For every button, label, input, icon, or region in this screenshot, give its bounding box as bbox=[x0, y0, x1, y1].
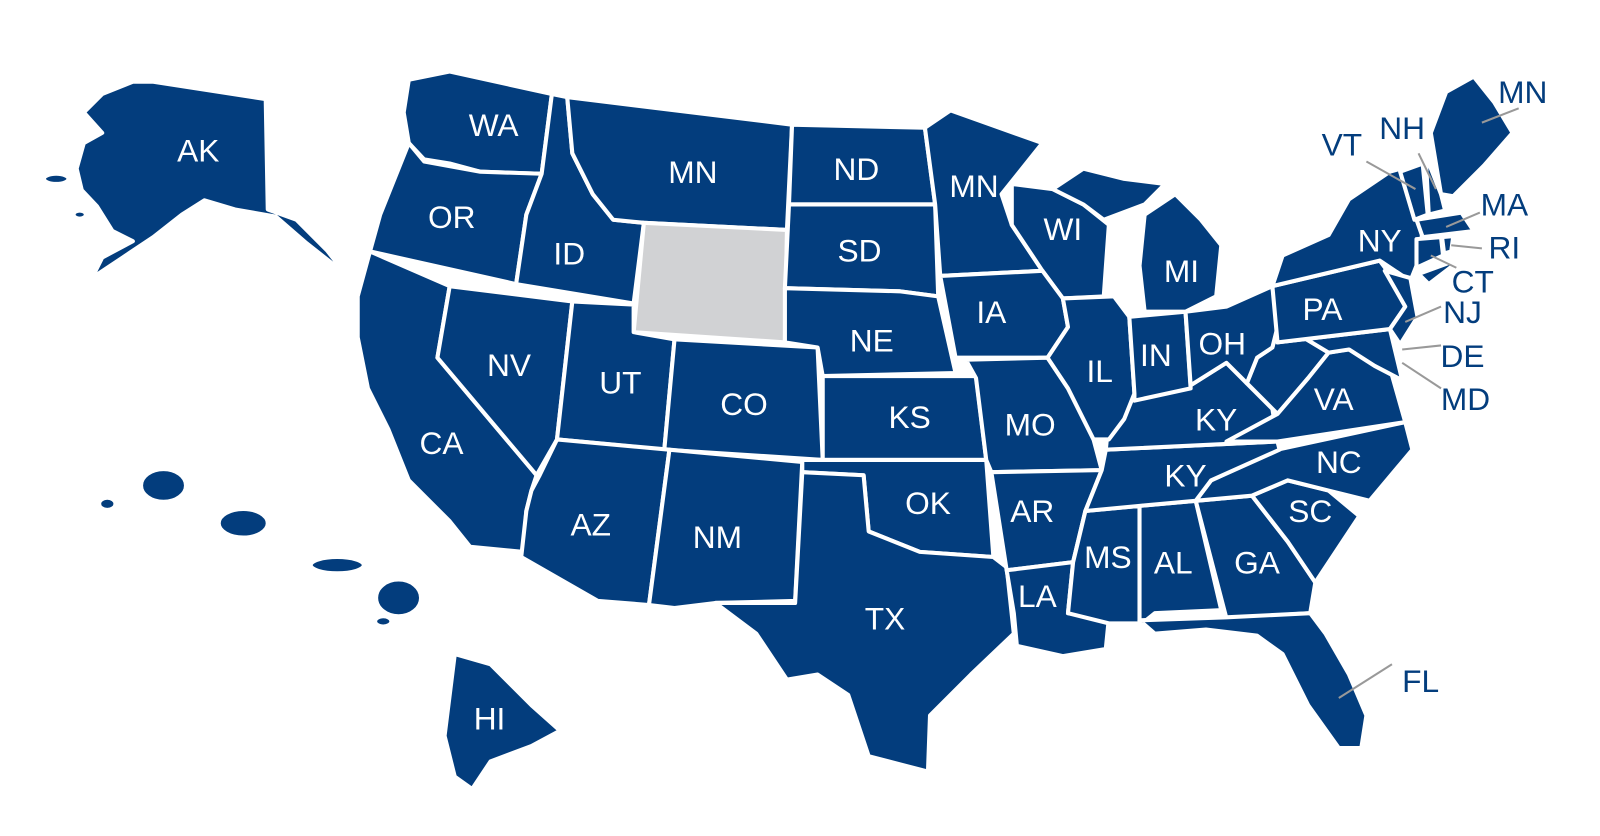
state: IN: IN bbox=[1140, 337, 1172, 373]
callout labels: northeast and FL: NH bbox=[1379, 110, 1425, 146]
state: AZ bbox=[521, 439, 669, 605]
state: MI bbox=[1053, 169, 1221, 312]
state: ND: ND bbox=[834, 151, 879, 187]
state: IN bbox=[1129, 312, 1191, 401]
state: MO: MO bbox=[1005, 406, 1056, 442]
state: VA: VA bbox=[1314, 381, 1355, 417]
state: TX bbox=[715, 472, 1014, 772]
state: CT bbox=[1416, 237, 1443, 268]
state: CO: CO bbox=[720, 386, 768, 422]
state: NE bbox=[785, 288, 956, 376]
state: WA: WA bbox=[469, 107, 519, 143]
state: OR bbox=[370, 143, 542, 284]
state: AL bbox=[1140, 501, 1221, 625]
state: MA bbox=[1416, 213, 1474, 237]
state: MS: MS bbox=[1084, 539, 1132, 575]
state: SD bbox=[785, 204, 938, 296]
state: NE: NE bbox=[850, 323, 894, 359]
state: ND bbox=[789, 125, 935, 204]
state: LA: LA bbox=[1018, 578, 1058, 614]
state: VT bbox=[1400, 164, 1428, 220]
state: MT: MN bbox=[668, 154, 718, 190]
state: NJ bbox=[1385, 271, 1418, 344]
state: NC bbox=[1196, 422, 1412, 501]
state: OK: OK bbox=[905, 485, 951, 521]
state: OK bbox=[802, 460, 993, 557]
state: WI: WI bbox=[1044, 211, 1082, 247]
state: MN: MN bbox=[949, 168, 999, 204]
state: TX: TX bbox=[865, 601, 905, 637]
state: SD: SD bbox=[838, 233, 882, 269]
callout labels: northeast and FL: MA bbox=[1481, 187, 1529, 223]
state: AK: AK bbox=[177, 132, 219, 168]
state: UT bbox=[557, 301, 675, 450]
callout labels: northeast and FL: NJ bbox=[1443, 294, 1482, 330]
state: ID: ID bbox=[553, 236, 585, 272]
callout labels: northeast and FL bbox=[1322, 74, 1547, 699]
state: CA bbox=[358, 251, 537, 552]
state: WI bbox=[1012, 184, 1109, 298]
state: IL: IL bbox=[1086, 353, 1113, 389]
state: KS: KS bbox=[888, 399, 931, 435]
state: GA: GA bbox=[1234, 544, 1281, 580]
state: FL bbox=[1140, 613, 1366, 748]
state: TN bbox=[1085, 442, 1280, 511]
state: LA bbox=[1007, 562, 1109, 656]
callout labels: northeast and FL: FL bbox=[1402, 663, 1439, 699]
state: NM: NM bbox=[693, 519, 742, 555]
callout labels: northeast and FL: MD bbox=[1441, 381, 1490, 417]
state: WA bbox=[404, 72, 552, 174]
state: PA bbox=[1272, 261, 1405, 342]
state: ID bbox=[516, 94, 644, 304]
state: AR bbox=[991, 470, 1102, 570]
callout labels: northeast and FL: MN bbox=[1498, 74, 1547, 110]
state: TN: KY bbox=[1164, 457, 1207, 493]
state: KS bbox=[823, 376, 986, 460]
state: OR: OR bbox=[428, 199, 475, 235]
state: MT bbox=[567, 97, 792, 230]
callout labels: northeast and FL: RI bbox=[1489, 230, 1520, 266]
state: IA: IA bbox=[976, 294, 1007, 330]
state: NV: NV bbox=[487, 347, 531, 383]
state: CA: CA bbox=[420, 425, 464, 461]
state: KY: KY bbox=[1195, 401, 1237, 437]
state: PA: PA bbox=[1303, 291, 1343, 327]
state: IL bbox=[1048, 296, 1134, 439]
state: AZ: AZ bbox=[570, 507, 611, 543]
state: HI: HI bbox=[474, 701, 505, 737]
state: NV bbox=[437, 286, 572, 475]
state: ME bbox=[1431, 77, 1513, 196]
state: MN bbox=[925, 110, 1042, 276]
callout labels: northeast and FL: DE bbox=[1440, 338, 1484, 374]
state: MO bbox=[966, 358, 1102, 472]
state: OH bbox=[1186, 286, 1278, 385]
state: UT: UT bbox=[599, 364, 641, 400]
state: NC: NC bbox=[1316, 444, 1362, 480]
callout labels: northeast and FL: CT bbox=[1452, 263, 1494, 299]
state: AR: AR bbox=[1010, 493, 1054, 529]
state: MS bbox=[1068, 506, 1140, 623]
state: VA bbox=[1226, 347, 1405, 442]
state: WV bbox=[1247, 327, 1329, 414]
state: KY bbox=[1106, 363, 1278, 450]
state: WY bbox=[634, 223, 787, 342]
state: SC bbox=[1252, 480, 1359, 583]
state: HI bbox=[99, 469, 560, 789]
state: MD bbox=[1278, 329, 1402, 380]
state: SC: SC bbox=[1288, 493, 1332, 529]
state: AL: AL bbox=[1154, 544, 1193, 580]
state: MI: MI bbox=[1164, 253, 1199, 289]
state: GA bbox=[1196, 496, 1315, 618]
state: NY: NY bbox=[1358, 222, 1402, 258]
state: NM bbox=[649, 450, 802, 608]
state: RI bbox=[1442, 236, 1453, 253]
state: IA bbox=[940, 271, 1068, 358]
state: NY bbox=[1272, 164, 1464, 286]
state: NH bbox=[1426, 155, 1445, 215]
callout labels: northeast and FL: VT bbox=[1322, 126, 1362, 162]
state: OH: OH bbox=[1199, 326, 1246, 362]
state: AK bbox=[44, 82, 345, 278]
state: CO bbox=[664, 339, 823, 460]
